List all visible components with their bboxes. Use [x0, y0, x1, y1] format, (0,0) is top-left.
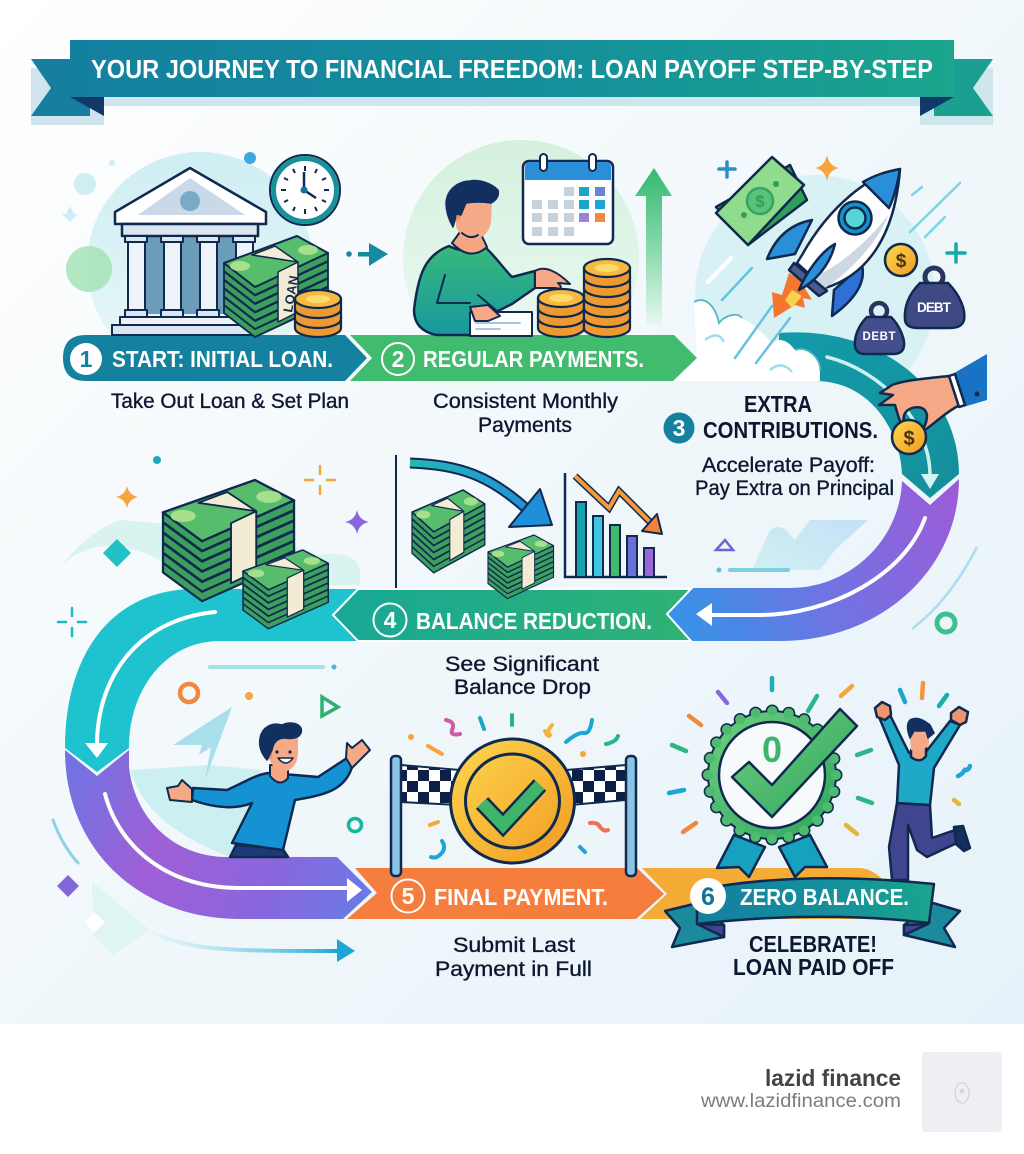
- flow arc: purple to step 4: [667, 479, 959, 641]
- step 6 description: LOAN PAID OFF: [733, 954, 894, 980]
- title banner: [31, 40, 993, 125]
- step 5 description: [435, 934, 592, 981]
- footer brand: www.lazidfinance.com: [700, 1091, 901, 1112]
- icon: DEBT weight large: DEBT: [917, 300, 952, 315]
- step 6 ribbon banner: ZERO BALANCE.: [740, 884, 909, 910]
- chart: money declining: [396, 455, 554, 599]
- icon: rocket: [767, 169, 900, 318]
- step 4 description: [445, 653, 599, 699]
- icon: badge ribbons: [717, 835, 827, 877]
- icon: clock: [270, 155, 340, 225]
- icon: bank: [112, 168, 266, 335]
- step 2 description: [433, 390, 619, 437]
- step 5 label band: 5: [402, 883, 415, 909]
- step 4 description: Balance Drop: [454, 676, 591, 699]
- icon: calendar: [523, 154, 613, 244]
- flow arc: teal around step 3: [779, 332, 959, 498]
- title text: YOUR JOURNEY TO FINANCIAL FREEDOM: LOAN PAYOFF STEP-BY-STEP: [91, 54, 933, 84]
- step 4 label band: 4: [384, 607, 397, 633]
- step 1 description: Take Out Loan & Set Plan: [111, 390, 349, 413]
- step 5 illustration: finish line: [391, 715, 636, 876]
- icon: DEBT weight large: [905, 268, 964, 328]
- step 4 description: See Significant: [445, 653, 599, 676]
- step 4 label band: [333, 589, 691, 641]
- step 4 illustration: shrinking balance: [58, 455, 667, 636]
- step 4 label band: BALANCE REDUCTION.: [416, 608, 652, 634]
- icon: running person: [167, 723, 370, 857]
- step 5 label band: [347, 868, 664, 919]
- step 2 description: Consistent Monthly: [433, 390, 619, 413]
- clouds: [673, 300, 820, 381]
- step 2 label band: [350, 335, 697, 381]
- icon: coin stack: [295, 290, 341, 337]
- step 1 label band: START: INITIAL LOAN.: [112, 346, 333, 372]
- rays: [669, 678, 970, 834]
- icon: checkered flags: [391, 756, 636, 876]
- icon: badge with zero and check: 0: [762, 729, 782, 770]
- step 3 heading and description: 3: [673, 415, 685, 441]
- logo placeholder: [922, 1052, 1002, 1132]
- chart: bar chart with falling arrow: [565, 473, 667, 577]
- icon: gold medal with check: [450, 739, 574, 863]
- step 6 description: CELEBRATE!: [749, 931, 877, 957]
- background blobs: [88, 140, 934, 370]
- step 1 illustration: bank, clock, money: [62, 152, 341, 337]
- icon: large money stack: [163, 480, 294, 601]
- step 6 yellow band: [640, 868, 885, 919]
- footer brand: [700, 1052, 1002, 1132]
- icon: money stack with LOAN band: LOAN: [280, 274, 301, 314]
- step 6 ribbon banner: 6: [701, 883, 715, 911]
- icon: jumping person: [875, 702, 970, 880]
- icon: DEBT weight small: DEBT: [862, 331, 896, 343]
- step 5 illustration: runner: [53, 664, 370, 962]
- step 2 description: Payments: [478, 414, 572, 437]
- step 6 description: [733, 931, 894, 980]
- step 5 description: Submit Last: [453, 934, 575, 957]
- icon: coin: [885, 244, 917, 276]
- step 2 illustration: person paying: [414, 154, 672, 337]
- arrow: step 1 to step 2: [346, 243, 388, 266]
- icon: DEBT weight small: [855, 303, 904, 354]
- step 3 heading and description: Accelerate Payoff:: [702, 454, 875, 477]
- icon: person: [414, 181, 570, 336]
- step 3 heading and description: [664, 391, 894, 500]
- sparkles: [719, 162, 735, 177]
- step 6 illustration: zero balance badge and celebrating person: [669, 678, 970, 880]
- step 3 heading and description: Pay Extra on Principal: [695, 477, 894, 500]
- icon: money stack with LOAN band: [224, 236, 328, 337]
- icon: badge with zero and check: [708, 709, 857, 839]
- icon: growth arrow: [635, 168, 672, 325]
- footer brand: lazid finance: [765, 1065, 901, 1091]
- decoration: right-side mountain and ring: [716, 520, 977, 632]
- confetti: [428, 715, 618, 858]
- step 2 label band: 2: [392, 346, 404, 372]
- step 2 label band: REGULAR PAYMENTS.: [423, 346, 644, 372]
- icon: small money stack: [243, 550, 328, 629]
- icon: coin: $: [896, 251, 907, 272]
- step 1 label band: [63, 335, 367, 381]
- flow arc: cyan to step 4: [65, 589, 358, 772]
- arrow: small forward arrow: [152, 932, 355, 962]
- step 3 illustration: rocket: [673, 155, 965, 381]
- step 5 description: Payment in Full: [435, 958, 592, 981]
- icon: hand dropping coin: [879, 354, 987, 454]
- step 3 heading and description: CONTRIBUTIONS.: [703, 417, 878, 443]
- flow arc: purple to step 5: [65, 750, 372, 919]
- icon: cash bill: [716, 157, 807, 245]
- step 6 ribbon banner: [665, 878, 960, 947]
- icon: coin in hand: $: [903, 428, 915, 450]
- icon: cash bill: $: [755, 192, 765, 211]
- step 5 label band: FINAL PAYMENT.: [434, 884, 608, 910]
- step 1 label band: 1: [80, 346, 93, 372]
- icon: coin stacks: [538, 259, 630, 337]
- step 3 heading and description: EXTRA: [744, 391, 812, 417]
